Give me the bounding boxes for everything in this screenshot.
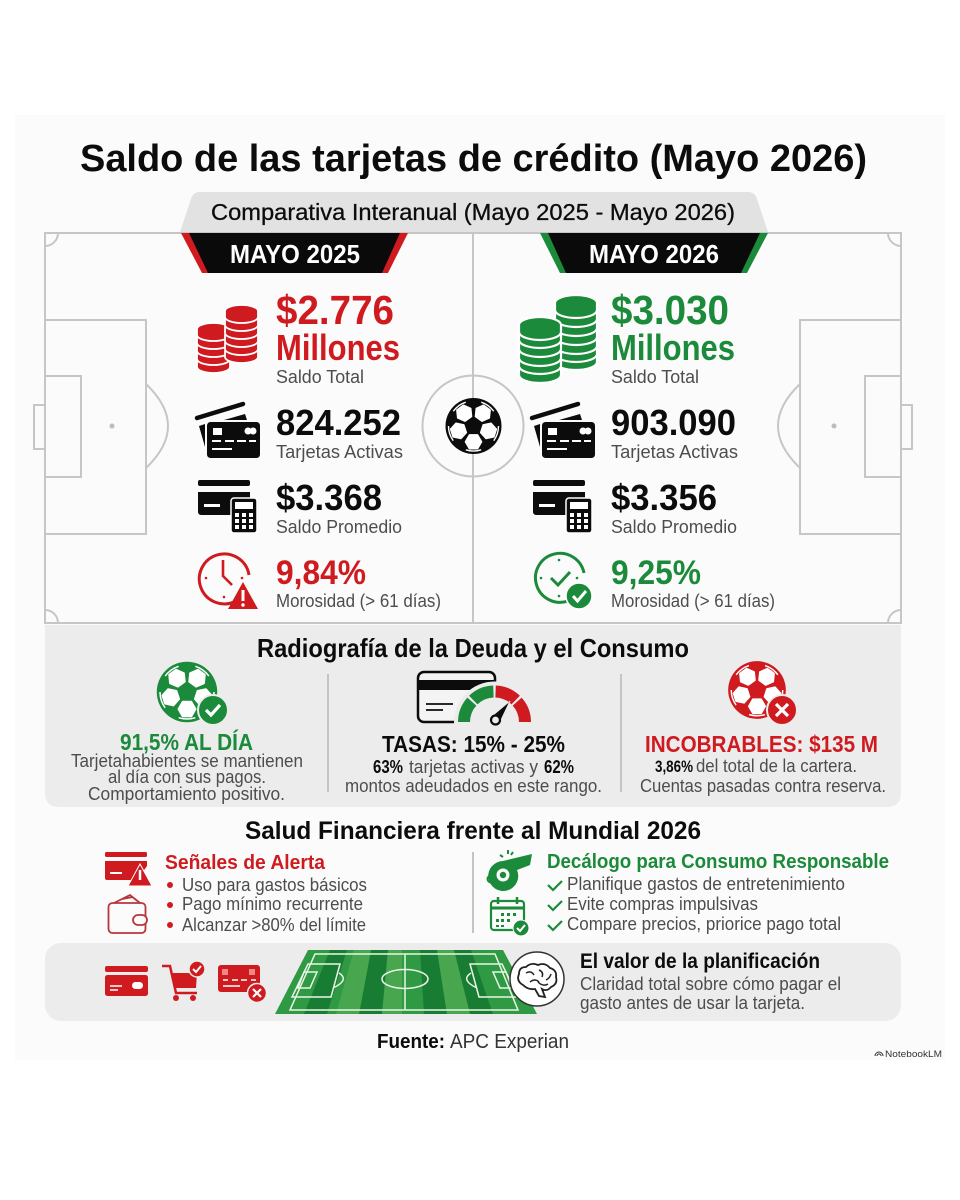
source: APC Experian — [450, 1031, 569, 1053]
text: planificación — [580, 950, 841, 1013]
column: incobrables: INCOBRABLES: $135 M — [645, 731, 878, 757]
tarjetas activas 2026: 903.090 — [611, 402, 736, 443]
icon: credit cards — [197, 404, 260, 458]
column: al día: 91,5% AL DÍA — [120, 728, 253, 755]
subtitle band — [180, 192, 768, 232]
check list: decálogo: Evite compras impulsivas — [567, 894, 758, 914]
source — [377, 1031, 569, 1053]
icon: brain — [510, 952, 564, 1006]
panel: mayo 2025 — [181, 233, 441, 611]
tarjetas activas 2025: 824.252 — [276, 402, 401, 443]
icon: red ball with cross — [728, 661, 797, 725]
panel: decálogo — [488, 850, 889, 936]
tarjetas activas 2025: Tarjetas Activas — [276, 441, 403, 462]
banner: mayo 2025: MAYO 2025 — [230, 239, 360, 269]
banner: mayo 2025 — [181, 233, 408, 273]
saldo total 2025: Millones — [276, 327, 400, 368]
subtitle band: Comparativa Interanual (Mayo 2025 - Mayo 2026) — [211, 199, 735, 225]
saldo promedio 2025 — [276, 477, 402, 537]
column: incobrables: Cuentas pasadas contra reserva. — [640, 776, 886, 796]
saldo promedio 2025: Saldo Promedio — [276, 516, 402, 537]
football pitch lines — [34, 233, 912, 623]
icon: shopping cart — [162, 961, 205, 1001]
bullet list: alertas: Pago mínimo recurrente — [182, 894, 363, 914]
icon: red card — [105, 966, 148, 996]
saldo promedio 2025: $3.368 — [276, 477, 382, 518]
icon: centre football — [446, 398, 502, 454]
text: planificación: Claridad total sobre cómo pagar el — [580, 974, 841, 994]
saldo total 2026: $3.030 — [611, 287, 729, 333]
column: al día: Tarjetahabientes se mantienen — [71, 751, 303, 771]
panel: radiografía — [45, 625, 901, 807]
column: tasas: 63% — [373, 757, 403, 777]
column: al día: Comportamiento positivo. — [88, 784, 285, 804]
background panel — [15, 115, 945, 1060]
saldo promedio 2026: Saldo Promedio — [611, 516, 737, 537]
banner: mayo 2026 — [540, 233, 768, 273]
saldo total 2026: Millones — [611, 327, 735, 368]
column: tasas: montos adeudados en este rango. — [345, 776, 602, 796]
panel: señales de alerta — [105, 852, 367, 935]
bullet list: alertas: Uso para gastos básicos — [182, 875, 367, 895]
heading: radiografía: Radiografía de la Deuda y el Consumo — [257, 633, 689, 663]
bullet list: alertas — [167, 875, 367, 935]
icon: green coins — [519, 295, 597, 383]
icon: green ball with check — [157, 662, 228, 725]
watermark: notebooklm: NotebookLM — [885, 1049, 942, 1060]
title: Saldo de las tarjetas de crédito (Mayo 2026) — [80, 138, 867, 180]
morosidad 2026: Morosidad (> 61 días) — [611, 591, 775, 611]
icon: clock with warning — [199, 554, 258, 609]
morosidad 2025: Morosidad (> 61 días) — [276, 591, 441, 611]
icon: wallet — [108, 895, 147, 933]
column: incobrables — [640, 661, 886, 796]
morosidad 2025 — [276, 554, 441, 611]
column: incobrables: 3,86% — [655, 757, 693, 776]
panel: el valor de la planificación — [45, 943, 901, 1021]
saldo total 2026: Saldo Total — [611, 366, 699, 387]
icon: card and calculator — [198, 480, 257, 533]
icon: card and calculator — [533, 480, 592, 533]
panel: señales de alerta: Señales de Alerta — [165, 852, 326, 874]
check list: decálogo — [548, 874, 845, 934]
morosidad 2025: 9,84% — [276, 554, 366, 592]
morosidad 2026: 9,25% — [611, 554, 701, 592]
saldo total 2025 — [276, 287, 400, 387]
heading: salud financiera: Salud Financiera frente al Mundial 2026 — [245, 817, 701, 845]
saldo total 2025: Saldo Total — [276, 366, 364, 387]
panel: mayo 2026 — [519, 233, 775, 611]
illustration: green pitch — [275, 950, 537, 1014]
column: tasas: 62% — [544, 757, 574, 777]
icon: clock with check — [535, 553, 592, 609]
icon: card with gauge — [418, 672, 535, 724]
column: al día: al día con sus pagos. — [108, 767, 266, 787]
panel: decálogo: Decálogo para Consumo Responsable — [547, 851, 889, 873]
tarjetas activas 2026: Tarjetas Activas — [611, 441, 738, 462]
text: planificación: gasto antes de usar la tarjeta. — [580, 993, 805, 1013]
morosidad 2026 — [611, 554, 775, 611]
saldo total 2026 — [611, 287, 735, 387]
tarjetas activas 2025 — [276, 402, 403, 462]
source: Fuente: — [377, 1031, 445, 1053]
icon: red coins — [197, 305, 258, 373]
column: al día — [71, 662, 303, 804]
icon: whistle — [488, 850, 532, 891]
text: planificación: El valor de la planificación — [580, 950, 820, 973]
tarjetas activas 2026 — [611, 402, 738, 462]
column: tasas — [345, 672, 602, 796]
column: tasas: TASAS: 15% - 25% — [382, 731, 565, 757]
check list: decálogo: Planifique gastos de entretenimiento — [567, 874, 845, 894]
icon: calendar with check — [491, 897, 529, 936]
banner: mayo 2026: MAYO 2026 — [589, 239, 719, 269]
icon: rejected card — [218, 965, 266, 1002]
icon: credit cards — [532, 404, 595, 458]
column: incobrables: del total de la cartera. — [696, 756, 857, 776]
bullet list: alertas: Alcanzar >80% del límite — [182, 915, 366, 935]
saldo promedio 2026 — [611, 477, 737, 537]
check list: decálogo: Compare precios, priorice pago total — [567, 914, 841, 934]
icon: card with warning — [105, 852, 152, 886]
column: tasas: tarjetas activas y — [409, 757, 538, 777]
saldo total 2025: $2.776 — [276, 287, 394, 333]
saldo promedio 2026: $3.356 — [611, 477, 717, 518]
